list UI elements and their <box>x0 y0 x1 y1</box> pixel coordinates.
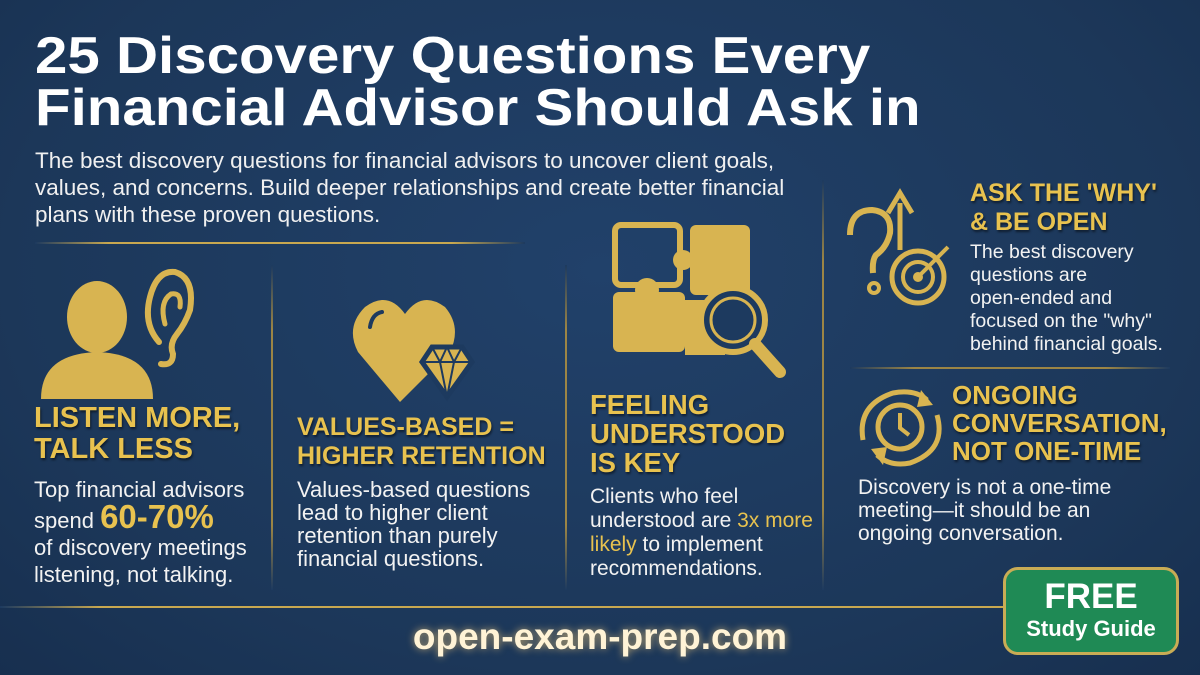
footer url: open-exam-prep.com <box>413 616 787 657</box>
heading: TALK LESS <box>34 433 193 465</box>
body text: financial questions. <box>297 546 484 571</box>
heading: & BE OPEN <box>970 208 1108 236</box>
subtitle <box>35 148 784 227</box>
heading: IS KEY <box>590 447 680 478</box>
icon: heart with diamond <box>352 300 468 402</box>
body text <box>970 241 1163 355</box>
title: 25 Discovery Questions Every <box>35 27 870 85</box>
panel: listen more <box>34 268 247 587</box>
heading: VALUES-BASED = <box>297 413 514 441</box>
body text: questions are <box>970 264 1087 286</box>
heading: UNDERSTOOD <box>590 418 785 449</box>
body text: Discovery is not a one-time <box>858 476 1111 499</box>
heading <box>970 179 1158 236</box>
icon: question mark and target <box>847 188 950 306</box>
title: Financial Advisor Should Ask in <box>35 79 921 137</box>
body text <box>590 485 813 580</box>
subtitle: plans with these proven questions. <box>35 202 380 227</box>
panel: ongoing conversation <box>858 380 1167 545</box>
panel: feeling understood <box>590 222 813 580</box>
body text <box>34 477 247 587</box>
panel: ask the why <box>847 179 1163 355</box>
panel: values-based <box>297 300 546 571</box>
body text: behind financial goals. <box>970 333 1163 355</box>
subtitle: values, and concerns. Build deeper relationships and create better financial <box>35 175 784 200</box>
body text: listening, not talking. <box>34 562 233 587</box>
heading <box>297 413 546 470</box>
heading: HIGHER RETENTION <box>297 442 546 470</box>
icon: clock with cycle arrows <box>860 389 942 466</box>
heading <box>34 402 240 465</box>
title <box>35 27 921 137</box>
body text: spend 60-70% <box>34 498 214 535</box>
body text: retention than purely <box>297 523 498 548</box>
heading <box>590 389 786 478</box>
body text <box>297 477 530 571</box>
heading: ASK THE 'WHY' <box>970 179 1157 207</box>
heading: FEELING <box>590 389 709 420</box>
body text: likely to implement <box>590 533 763 556</box>
heading <box>952 380 1167 466</box>
body text <box>858 476 1111 545</box>
body text: Values-based questions <box>297 477 530 502</box>
heading: NOT ONE-TIME <box>952 436 1141 466</box>
body text: meeting—it should be an <box>858 499 1090 522</box>
button: free study guide: Study Guide <box>1026 616 1156 641</box>
body text: of discovery meetings <box>34 535 247 560</box>
heading: LISTEN MORE, <box>34 402 240 434</box>
subtitle: The best discovery questions for financial advisors to uncover client goals, <box>35 148 774 173</box>
body text: understood are 3x more <box>590 509 813 532</box>
button: free study guide <box>1003 567 1179 655</box>
body text: Top financial advisors <box>34 477 244 502</box>
icon: person with ear <box>41 268 194 399</box>
icon: puzzle with magnifier <box>612 222 786 378</box>
body text: The best discovery <box>970 241 1134 263</box>
body text: open-ended and <box>970 287 1112 309</box>
heading: CONVERSATION, <box>952 408 1167 438</box>
body text: Clients who feel <box>590 485 738 508</box>
body text: ongoing conversation. <box>858 522 1063 545</box>
body text: focused on the "why" <box>970 310 1152 332</box>
heading: ONGOING <box>952 380 1078 410</box>
button: free study guide: FREE <box>1044 577 1138 616</box>
body text: recommendations. <box>590 557 763 580</box>
body text: lead to higher client <box>297 500 488 525</box>
